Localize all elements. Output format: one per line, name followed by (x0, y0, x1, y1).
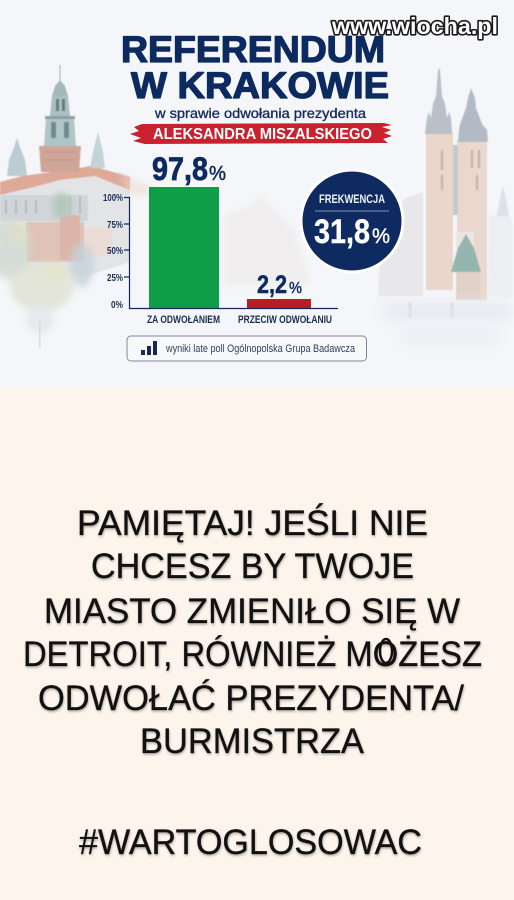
appeal paragraph: MIASTO ZMIENIŁO SIĘ W (44, 592, 460, 631)
appeal paragraph: CHCESZ BY TWOJE (91, 547, 414, 586)
name banner (130, 123, 392, 144)
text shadow: ODWOŁAĆ PREZYDENTA/ (38, 680, 465, 720)
illustration: market square ground (385, 303, 510, 344)
text shadow: PAMIĘTAJ! JEŚLI NIE (78, 504, 428, 544)
watermark: www.wiocha.pl (331, 13, 498, 39)
illustration: tree trunk (39, 320, 40, 348)
value: 97,8%: % (209, 163, 226, 185)
text shadow: BURMISTRZA (140, 724, 365, 762)
name: ALEKSANDRA MISZALSKIEGO (153, 126, 372, 143)
text shadow: MIASTO ZMIENIŁO SIĘ W (44, 594, 460, 632)
illustration: Wawel castle (0, 65, 130, 275)
message text (23, 503, 482, 864)
illustration: distant buildings behind chart (120, 174, 310, 285)
appeal paragraph: BURMISTRZA (140, 722, 365, 761)
bar: przeciw odwołaniu (247, 299, 311, 308)
value: 2,2%: 2,2 (257, 271, 287, 299)
chart axes (124, 197, 338, 308)
badge label: FREKWENCJA (319, 194, 385, 206)
axis labels (103, 193, 123, 311)
value: 2,2%: % (289, 280, 302, 297)
illustration: St Mary's Basilica (378, 68, 512, 317)
appeal paragraph (23, 503, 482, 761)
axis labels: 100% (103, 193, 123, 204)
icon: bars (141, 341, 157, 355)
title (121, 29, 389, 106)
axis labels: 25% (107, 273, 123, 284)
badge circle (301, 170, 403, 272)
panel: bottom cream background (0, 385, 514, 900)
category labels: ZA ODWOŁANIEM (147, 314, 220, 326)
panel: top poster (0, 0, 514, 387)
bar chart (103, 151, 338, 326)
category labels (147, 314, 332, 326)
appeal paragraph: ODWOŁAĆ PREZYDENTA/ (38, 679, 464, 718)
source box (127, 336, 366, 361)
axis labels: 75% (107, 220, 123, 231)
turnout badge (301, 170, 403, 272)
badge value: 31,8 (314, 213, 370, 251)
illustration: trees (0, 193, 94, 334)
appeal paragraph: DETROIT, RÓWNIEŻ MOŻESZ (23, 635, 482, 674)
axis labels: 50% (107, 246, 123, 257)
text shadow: CHCESZ BY TWOJE (92, 548, 414, 588)
text shadow (24, 504, 482, 864)
hashtag: #WARTOGLOSOWAC (79, 823, 422, 862)
red brush stroke (130, 123, 392, 144)
text shadow: DETROIT, RÓWNIEŻ MOŻESZ (24, 636, 482, 676)
bar: za odwołaniem (149, 187, 219, 308)
appeal paragraph: PAMIĘTAJ! JEŚLI NIE (77, 503, 428, 543)
subtitle: w sprawie odwołania prezydenta (154, 105, 366, 121)
poster background (0, 0, 514, 387)
title: REFERENDUM (121, 29, 385, 70)
turnout badge: % (372, 225, 390, 248)
category labels: PRZECIW ODWOŁANIU (238, 314, 332, 326)
source text: wyniki late poll Ogólnopolska Grupa Badawcza (165, 343, 356, 355)
axis labels: 0% (111, 300, 123, 311)
title: W KRAKOWIE (131, 65, 389, 106)
overlaid glyph artifact (380, 639, 392, 663)
value: 97,8%: 97,8 (152, 151, 208, 187)
text shadow: #WARTOGLOSOWAC (80, 824, 422, 864)
